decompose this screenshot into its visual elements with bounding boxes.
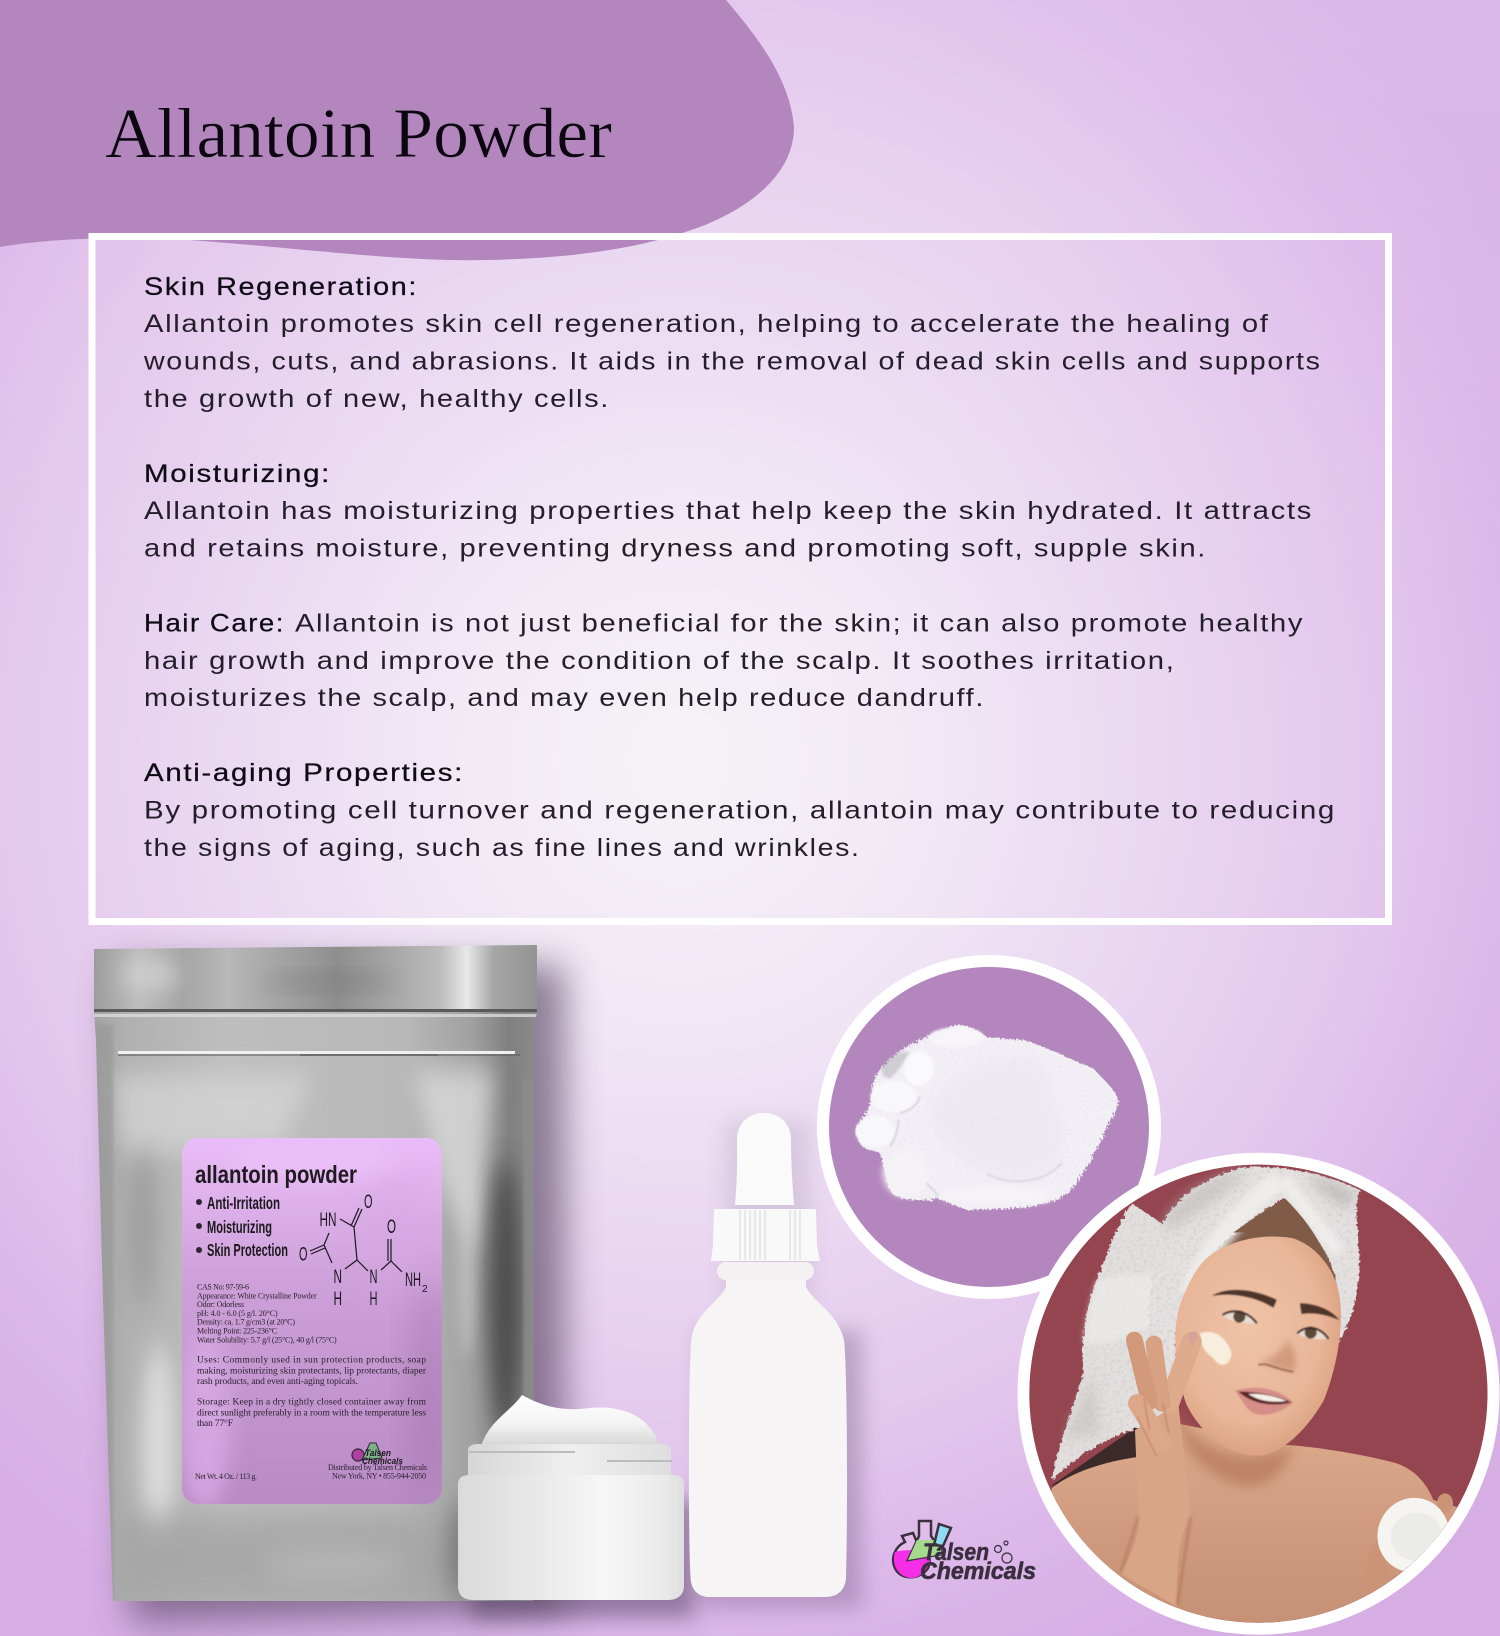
molecule diagram: H (334, 1289, 342, 1310)
label bullets: Moisturizing (207, 1217, 272, 1237)
portrait ring (1024, 1159, 1494, 1629)
panel frame (92, 236, 1388, 922)
text block: skin regeneration: the growth of new, healthy cells. (144, 385, 610, 413)
label specifications: Water Solubility: 5.7 g/l (25°C), 40 g/l (75°C) (197, 1335, 337, 1344)
molecule diagram: HN (320, 1210, 336, 1231)
label storage: direct sunlight preferably in a room with the temperature less (197, 1407, 426, 1418)
bottle neck ring (717, 1262, 814, 1280)
bottle cap (711, 1209, 820, 1261)
portrait nose (1257, 1338, 1296, 1372)
molecule diagram: O (387, 1217, 396, 1238)
dropper bottle (689, 1113, 847, 1597)
label specifications: Density: ca. 1.7 g/cm3 (at 20°C) (197, 1318, 295, 1327)
portrait jar (1378, 1493, 1453, 1586)
product shadows (112, 965, 862, 1622)
label specifications: CAS No: 97-59-6 (197, 1282, 249, 1291)
text block: skin regeneration: wounds, cuts, and abrasions. It aids in the removal of dead skin cells and supports (143, 348, 1322, 376)
label bullets (196, 1193, 288, 1260)
powder circle (823, 961, 1155, 1293)
text block: anti-aging (144, 759, 1336, 862)
pouch body (90, 945, 540, 1606)
text block: hair care (144, 609, 1304, 712)
text block: skin regeneration: Skin Regeneration: (144, 273, 418, 301)
pouch label (179, 1138, 450, 1510)
title: Allantoin Powder (105, 95, 612, 173)
jar base (458, 1475, 684, 1600)
portrait eye left (1212, 1290, 1277, 1323)
text block: moisturizing: Moisturizing: (144, 460, 331, 488)
portrait eye right (1297, 1303, 1339, 1339)
portrait head backing (1226, 1204, 1338, 1286)
label storage (197, 1397, 427, 1429)
molecule diagram: N (370, 1267, 378, 1288)
label footer: New York, NY • 855-944-2050 (332, 1472, 426, 1481)
label footer: Net Wt. 4 Oz. / 113 g. (195, 1472, 257, 1481)
text block: hair care: hair growth and improve the condition of the scalp. It soothes irritation, (144, 647, 1176, 675)
label storage: than 77°F (197, 1418, 233, 1429)
label specifications: pH: 4.0 - 6.0 (5 g/l. 20°C) (197, 1309, 278, 1318)
label uses: rash products, and even anti-aging topicals. (197, 1377, 358, 1387)
header blob (0, 0, 794, 260)
portrait hair (1233, 1198, 1326, 1257)
label mini logo: Chemicals (362, 1456, 403, 1466)
label specifications (197, 1282, 337, 1344)
text block: skin regeneration (143, 273, 1322, 413)
portrait towel tail (1052, 1203, 1177, 1480)
jar cream (481, 1395, 658, 1446)
text block: moisturizing (144, 460, 1313, 563)
circle background (823, 961, 1155, 1293)
jar neck (468, 1444, 671, 1477)
label specifications: Appearance: White Crystalline Powder (197, 1291, 317, 1300)
molecule diagram: NH (405, 1270, 421, 1291)
label mini logo: Talsen (365, 1448, 391, 1458)
panel: benefits (92, 236, 1388, 922)
molecule diagram: O (364, 1192, 372, 1213)
label bullets: Anti-Irritation (207, 1193, 280, 1213)
logo bubbles (994, 1541, 1012, 1563)
portrait illustration (1020, 1160, 1497, 1636)
bottle bulb (735, 1113, 794, 1205)
logo wordmark (920, 1539, 1036, 1585)
label uses (197, 1356, 427, 1387)
text block: hair care: moisturizes the scalp, and may even help reduce dandruff. (144, 684, 985, 712)
label mini logo (352, 1443, 403, 1466)
logo: Talsen Chemicals (893, 1521, 1036, 1585)
foil pouch (90, 945, 540, 1606)
portrait face (1175, 1237, 1341, 1456)
text block: hair care: Hair Care: (144, 609, 285, 637)
logo wordmark: Talsen (923, 1539, 989, 1566)
label footer (195, 1463, 427, 1481)
label uses: making, moisturizing skin protectants, lip protectants, diaper (197, 1366, 427, 1376)
text block: moisturizing: Allantoin has moisturizing properties that help keep the skin hydrated. It attracts (144, 497, 1313, 525)
label footer: Distributed by Talsen Chemicals (328, 1463, 427, 1472)
label bullets: Skin Protection (207, 1240, 288, 1260)
portrait mouth (1235, 1388, 1293, 1415)
text block: anti-aging: the signs of aging, such as fine lines and wrinkles. (144, 834, 860, 862)
label specifications: Odor: Odorless (197, 1300, 244, 1309)
text block: skin regeneration: Allantoin promotes skin cell regeneration, helping to accelerate the healing of (144, 310, 1270, 338)
portrait chest (1051, 1424, 1457, 1622)
label storage: Storage: Keep in a dry tightly closed container away from (197, 1397, 427, 1408)
portrait hand (1120, 1331, 1197, 1607)
molecule diagram: H (370, 1289, 378, 1310)
portrait cream dab (1200, 1332, 1232, 1365)
molecule diagram (299, 1192, 428, 1310)
molecule diagram: O (299, 1244, 308, 1266)
powder pile (855, 1025, 1118, 1210)
portrait neck shadow (1180, 1419, 1294, 1490)
label uses: Uses: Commonly used in sun protection products, soap (197, 1356, 426, 1366)
molecule diagram: N (334, 1267, 342, 1288)
text block: hair care: Allantoin is not just beneficial for the skin; it can also promote healthy (295, 609, 1304, 637)
label specifications: Melting Point: 225-236°C (197, 1326, 277, 1335)
bottle body (689, 1278, 847, 1597)
logo flasks (893, 1521, 951, 1578)
text block: anti-aging: By promoting cell turnover and regeneration, allantoin may contribute to reducing (144, 796, 1336, 824)
logo wordmark: Chemicals (920, 1558, 1036, 1585)
portrait hair behind neck (1050, 1428, 1138, 1486)
cream jar (458, 1395, 684, 1600)
portrait circle (1020, 1159, 1497, 1636)
text block: moisturizing: and retains moisture, preventing dryness and promoting soft, supple skin. (144, 535, 1207, 563)
label title: allantoin powder (195, 1161, 357, 1189)
text block: anti-aging: Anti-aging Properties: (144, 759, 464, 787)
molecule diagram: 2 (422, 1284, 428, 1295)
portrait towel wrap (1148, 1166, 1361, 1342)
